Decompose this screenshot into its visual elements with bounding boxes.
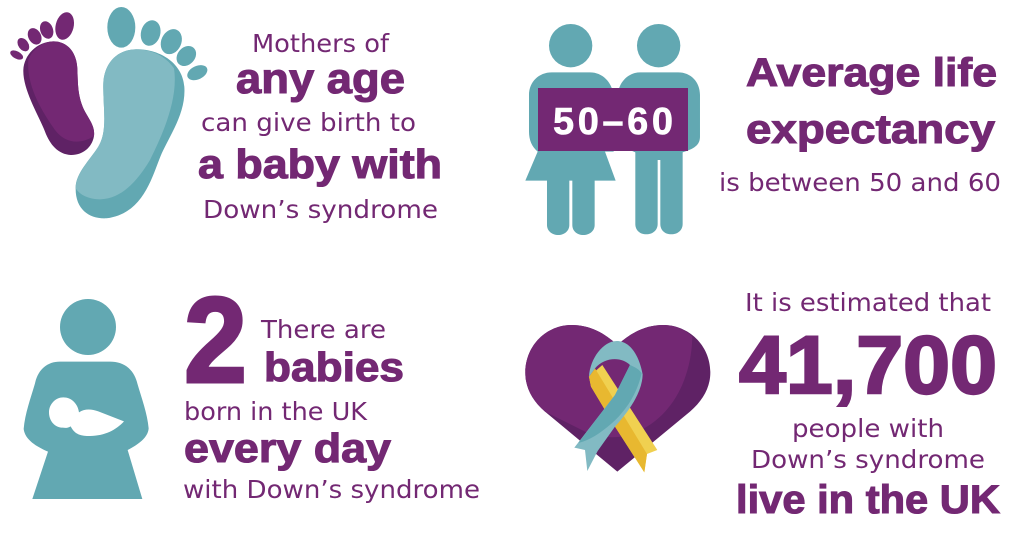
text: mothers of any age: Down’s syndrome	[203, 195, 438, 224]
panel: babies born every day	[24, 272, 480, 504]
text: 2 babies every day: born in the UK	[184, 397, 368, 426]
panel: people living in the UK	[525, 288, 1000, 522]
age range banner	[538, 88, 688, 151]
text: mothers of any age	[198, 29, 442, 224]
text: 2 babies every day: every day	[184, 425, 391, 471]
text: 2 babies every day: 2	[184, 272, 247, 408]
text: 2 babies every day: babies	[264, 344, 404, 390]
text: average life expectancy: Average life	[746, 51, 997, 95]
text: 2 babies every day: There are	[260, 315, 386, 344]
text: 41,700 people: 41,700	[739, 320, 997, 411]
text: 2 babies every day: with Down’s syndrome	[183, 475, 480, 504]
panel: mothers of any age	[9, 7, 442, 224]
icon: mother holding baby	[24, 299, 149, 499]
ribbon	[574, 341, 657, 472]
text: 41,700 people: live in the UK	[736, 478, 1000, 522]
text: 41,700 people: people with	[792, 414, 944, 443]
baby cutout	[49, 397, 124, 436]
text: average life expectancy: expectancy	[746, 106, 995, 152]
woman figure	[525, 24, 616, 235]
purple foot	[9, 10, 94, 155]
man figure	[619, 24, 700, 234]
mother figure	[24, 299, 149, 499]
icon: heart with ribbon	[525, 325, 710, 472]
heart	[525, 325, 710, 472]
text: mothers of any age: can give birth to	[201, 108, 416, 137]
text: 2 babies every day	[183, 272, 480, 504]
text: 41,700 people: Down’s syndrome	[751, 445, 985, 474]
icon: baby feet	[9, 7, 210, 218]
text: 41,700 people: It is estimated that	[745, 288, 991, 317]
text: mothers of any age: Mothers of	[252, 29, 390, 58]
age range banner: 50–60	[553, 101, 673, 143]
text: 41,700 people	[736, 288, 1000, 522]
text: average life expectancy	[719, 51, 1001, 197]
panel: average life expectancy	[525, 24, 1001, 235]
text: mothers of any age: any age	[236, 55, 405, 103]
text: mothers of any age: a baby with	[198, 141, 442, 187]
text: average life expectancy: is between 50 and 60	[719, 168, 1001, 197]
icon: two people	[525, 24, 700, 235]
teal foot	[76, 7, 210, 218]
